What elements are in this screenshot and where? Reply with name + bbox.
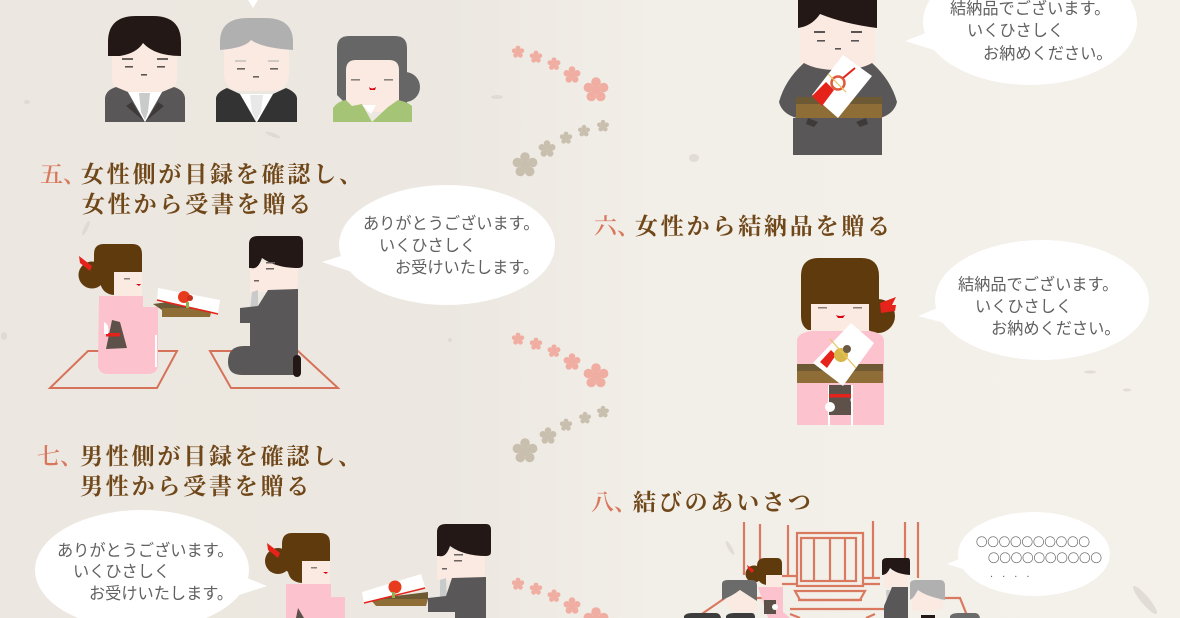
speech bubble: top right: お納めください。 [983,45,1112,63]
figure: bride presenting [78,244,158,374]
heading: step 7: 男性側が目録を確認し、 [80,444,364,469]
speech bubble: step 7: ありがとうございます。 [57,541,233,560]
heading: step 7: 男性から受書を贈る [80,474,312,499]
flowers: third row [512,578,608,618]
illustration: shrine altar [696,521,968,618]
flowers: first row [512,46,609,176]
figure: bride, step 8 [746,558,790,618]
icon: speech bubble tail, top [248,0,258,8]
tatami mats: step 5 [50,351,338,388]
speech bubble: step 6 [918,240,1149,360]
speech bubble: step 8: . . . . [990,568,1032,580]
speech bubble: step 5 [322,185,555,305]
speech bubble: step 8: ○○○○○○○○○○ [988,550,1102,566]
speech bubble: step 5: いくひさしく [379,237,476,255]
heading: step 5: 女性から受書を贈る [82,192,314,217]
speech bubble: step 6: いくひさしく [975,298,1072,316]
speech bubble: top right [905,0,1137,85]
heading: step 6: 六、 [594,214,640,239]
gift: step 7 tray and envelope [362,574,428,606]
flowers: second row [512,333,609,462]
figure: groom receiving [228,236,303,377]
figure: bride, step 7 [265,533,345,618]
speech bubble: step 6: 結納品でございます。 [958,275,1118,294]
gift: step 5 tray and envelope [153,288,220,317]
heading: step 8: 八、 [591,490,637,515]
heading: step 7 [37,444,364,499]
speech bubble: step 8 [947,512,1110,596]
speech bubble: top right: いくひさしく [967,22,1064,40]
speech bubble: step 7: いくひさしく [73,563,170,581]
figure: groom's mother [333,36,420,122]
figure: groom, step 7 [428,524,491,618]
speech bubble: step 8: ○○○○○○○○○○ [976,534,1090,550]
heading: step 5 [40,162,365,217]
speech bubble: step 7 [35,510,267,618]
heading: step 6: 女性から結納品を贈る [635,214,893,239]
figure: groom with gift, top right [779,0,897,155]
heading: step 8: 結びのあいさつ [633,490,814,515]
speech bubble: step 5: お受けいたします。 [395,259,539,277]
figure: bride with gift, right [797,258,896,426]
heading: step 7: 七、 [37,444,83,469]
speech bubble: step 5: ありがとうございます。 [363,214,539,233]
figure: groom, step 8 [882,558,910,618]
figure: groom's father [216,18,297,122]
speech bubble: top right: 結納品でございます。 [950,0,1110,18]
figure: guests, step 8 [684,580,980,618]
figure: groom [105,16,185,122]
speech bubble: step 7: お受けいたします。 [89,585,233,603]
heading: step 5: 女性側が目録を確認し、 [81,162,365,187]
speech bubble: step 6: お納めください。 [991,320,1120,338]
heading: step 5: 五、 [40,162,86,187]
